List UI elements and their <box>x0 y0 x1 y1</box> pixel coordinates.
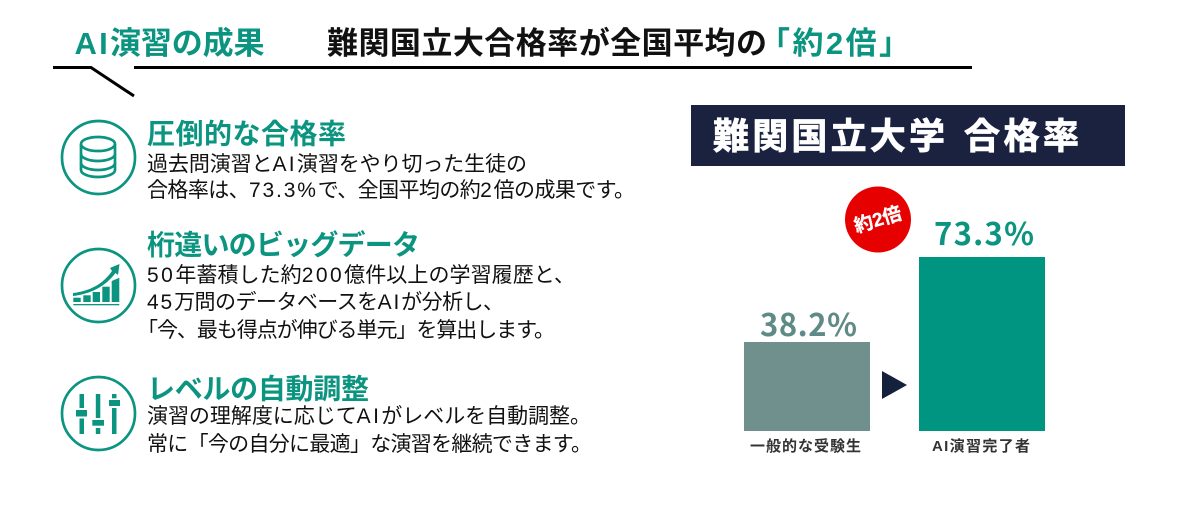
header <box>53 26 972 96</box>
body text: 合格率は、73.3%で、全国平均の約2倍の成果です。 <box>147 179 635 202</box>
panel: pass-rate chart <box>691 105 1125 455</box>
label: AI completers: AI演習完了者 <box>932 437 1030 455</box>
body text: 45万問のデータベースをAIが分析し、 <box>147 291 504 314</box>
body text: 演習の理解度に応じてAIがレベルを自動調整。 <box>147 405 591 428</box>
body text: 常に「今の自分に最適」な演習を継続できます。 <box>147 433 592 456</box>
body text <box>137 264 575 342</box>
panel: item 3 <box>62 374 592 456</box>
value: 73.3%: 73.3% <box>934 209 1034 254</box>
heading: レベルの自動調整 <box>147 374 369 404</box>
body text <box>147 405 592 456</box>
title highlight: 「約2倍」 <box>759 26 910 61</box>
icon: sliders <box>62 377 135 450</box>
arrow <box>882 371 907 399</box>
bar: average <box>744 342 870 431</box>
body text: 「今、最も得点が伸びる単元」を算出します。 <box>137 319 555 342</box>
callout rule <box>53 68 972 96</box>
icon: growth chart <box>62 249 135 322</box>
badge <box>845 186 911 252</box>
icon: database <box>62 121 135 194</box>
value: 38.2%: 38.2% <box>760 300 857 345</box>
badge: 約2倍 <box>852 202 904 238</box>
heading: 桁違いのビッグデータ <box>147 228 420 260</box>
body text: 過去問演習とAI演習をやり切った生徒の <box>147 153 527 176</box>
section label: AI演習の成果 <box>74 26 264 61</box>
label: average: 一般的な受験生 <box>750 437 861 455</box>
body text <box>147 153 635 202</box>
body text: 50年蓄積した約200億件以上の学習履歴と、 <box>147 264 575 287</box>
panel: item 1 <box>62 118 635 202</box>
heading: 圧倒的な合格率 <box>147 118 346 150</box>
panel: item 2 <box>62 228 575 342</box>
chart banner: 難関国立大学 <box>713 116 945 156</box>
chart banner: 合格率 <box>964 116 1079 156</box>
chart banner <box>691 105 1125 166</box>
title: 難関国立大合格率が全国平均の <box>327 26 767 61</box>
bar: AI completers <box>919 257 1045 431</box>
